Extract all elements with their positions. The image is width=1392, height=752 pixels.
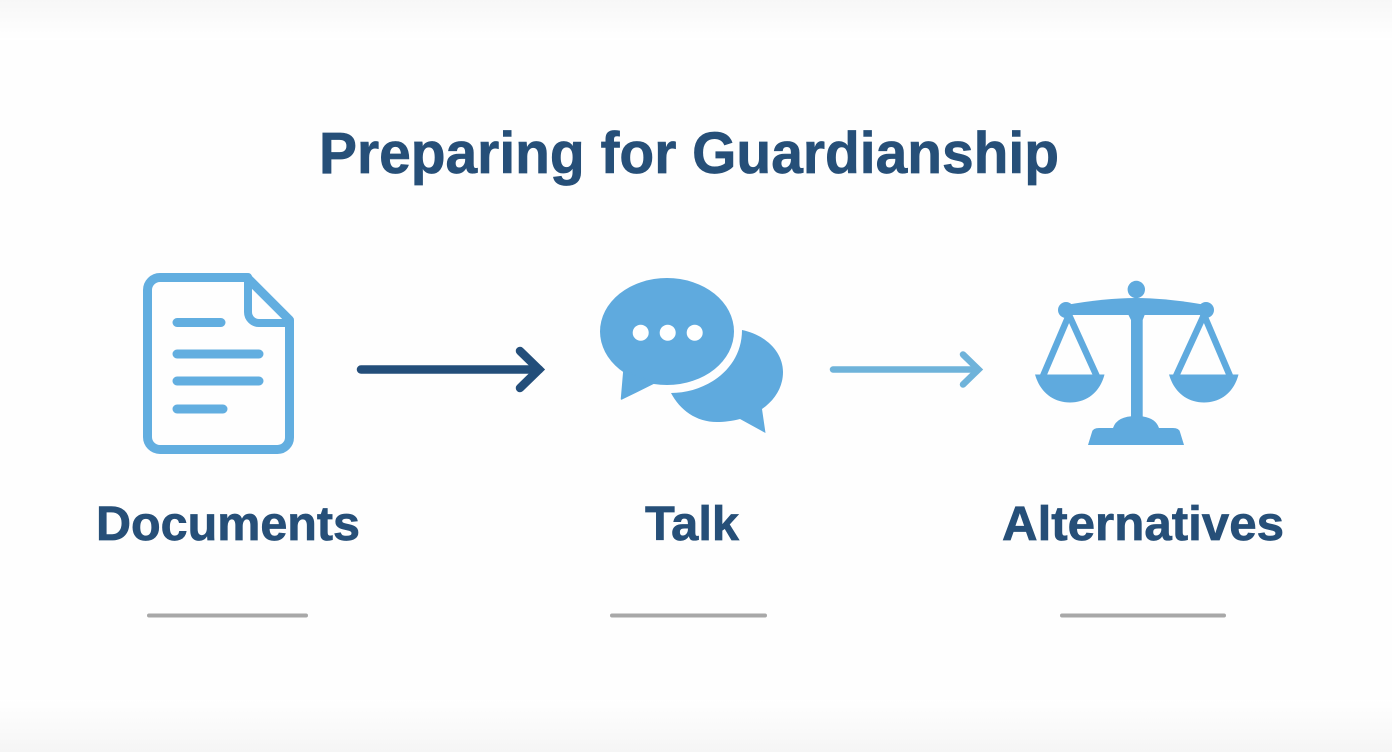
icon: speech bubbles [600, 278, 783, 433]
label: Alternatives: Alternatives [1002, 498, 1284, 551]
label: Documents: Documents [96, 498, 360, 551]
underline: Alternatives [1060, 614, 1226, 618]
arrow: documents to talk [361, 351, 539, 388]
underline: Documents [147, 614, 308, 618]
icon: document [148, 277, 290, 450]
underline: Talk [610, 614, 767, 618]
arrow: talk to alternatives [833, 354, 978, 384]
icon: balance scale [1035, 281, 1238, 445]
title: Preparing for Guardianship [319, 121, 1059, 186]
label: Talk: Talk [645, 498, 739, 551]
